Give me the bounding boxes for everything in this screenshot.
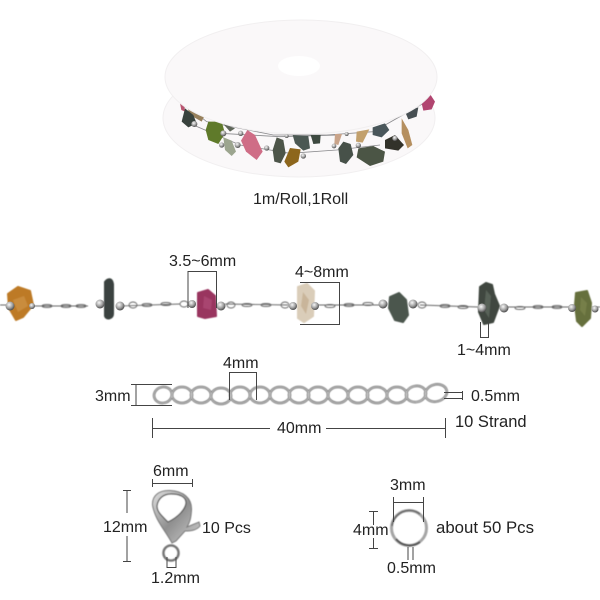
dimension: 1.2mm — [151, 557, 200, 587]
dimension: 40mm: 40mm — [277, 420, 321, 437]
dimension: 1.2mm: 1.2mm — [151, 570, 200, 587]
dimension: 4mm extender link — [223, 355, 259, 400]
dimension: 12mm — [103, 490, 147, 562]
label: 10 Pcs: 10 Pcs — [202, 520, 251, 537]
clasp ring — [164, 546, 178, 560]
clasp body — [152, 490, 200, 543]
dimension: 3mm ring — [390, 477, 426, 522]
dimension: 3.5~6mm — [169, 253, 236, 308]
dimension: 40mm — [152, 418, 446, 438]
dimension: 1~4mm — [457, 322, 511, 359]
dimension: 4mm ring — [353, 512, 389, 548]
dimension: 4mm ring: 4mm — [353, 522, 389, 539]
dimension: 0.5mm — [444, 388, 520, 405]
label: about 50 Pcs: about 50 Pcs — [436, 518, 534, 537]
dimension: 12mm: 12mm — [103, 519, 147, 536]
spool center hole — [278, 56, 320, 76]
lobster clasp — [152, 490, 200, 560]
curb extender chain — [152, 382, 449, 405]
chain links — [0, 301, 600, 310]
link highlights — [152, 382, 449, 405]
dimension: 0.5mm ring: 0.5mm — [387, 560, 436, 577]
gemstone chain — [0, 279, 600, 326]
wound chain with chips — [179, 95, 435, 167]
steel beads — [6, 300, 598, 312]
dimension: 4mm extender link: 4mm — [223, 355, 259, 372]
dimension: 0.5mm ring — [387, 547, 436, 577]
chain links — [152, 382, 449, 405]
dimension: 4~8mm — [295, 264, 349, 325]
dimension: 3mm — [95, 384, 172, 406]
dimension: 0.5mm: 0.5mm — [471, 388, 520, 405]
label: 10 Strand: 10 Strand — [455, 413, 527, 431]
spool caption: 1m/Roll,1Roll — [253, 191, 348, 208]
dimension: 6mm: 6mm — [153, 463, 189, 480]
dimension: 3.5~6mm: 3.5~6mm — [169, 253, 236, 270]
dimension: 6mm — [152, 463, 192, 487]
dimension: 3mm ring: 3mm — [390, 477, 426, 494]
gemstone chips — [8, 279, 591, 326]
spool top disc — [165, 20, 437, 134]
spool bottom disc — [163, 59, 435, 177]
dimension: 3mm: 3mm — [95, 388, 131, 405]
dimension: 1~4mm: 1~4mm — [457, 342, 511, 359]
dimension: 4~8mm: 4~8mm — [295, 264, 349, 281]
spool of gemstone chain — [163, 20, 437, 177]
jump ring — [392, 510, 426, 546]
clasp opening — [157, 494, 186, 522]
